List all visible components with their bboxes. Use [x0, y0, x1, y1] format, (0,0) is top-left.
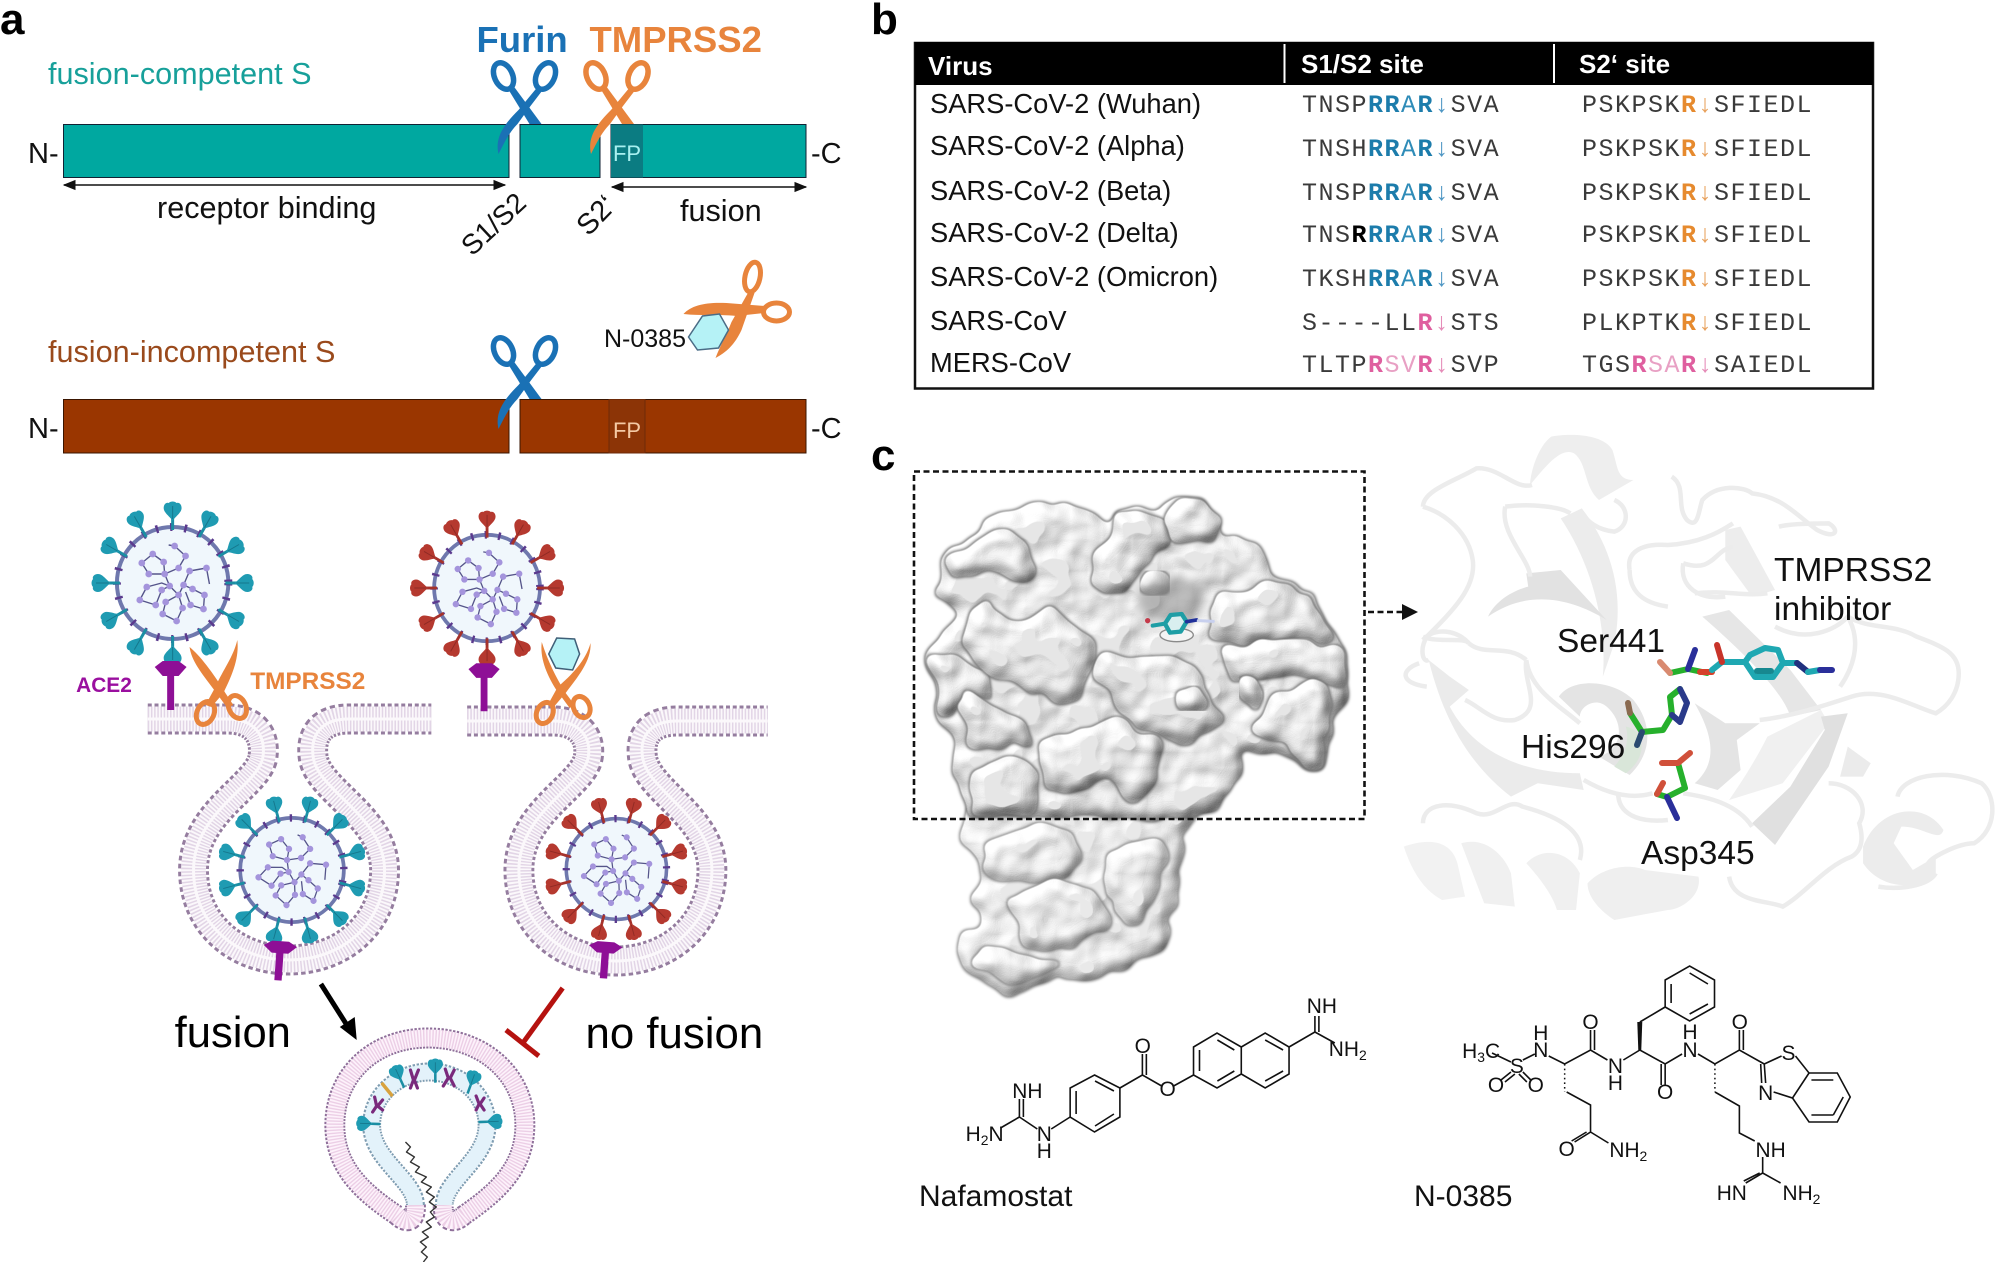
- row: Alpha: SARS-CoV-2 (Alpha): [930, 130, 1185, 161]
- row: Wuhan: [930, 88, 1813, 120]
- His296 sticks: [1628, 689, 1687, 745]
- icon: active TMPRSS2 scissors: [190, 640, 250, 727]
- Ser441 sticks: [1660, 650, 1712, 673]
- row: SARS-CoV: [930, 305, 1813, 338]
- label: His296: His296: [1521, 729, 1625, 766]
- row: Beta: SARS-CoV-2 (Beta): [930, 175, 1171, 206]
- chemical structure: N-0385: O: [1582, 1011, 1599, 1034]
- row: Delta: [930, 217, 1813, 250]
- virus: teal upper: [92, 502, 254, 664]
- label: N-0385: N-0385: [604, 325, 686, 353]
- row: Wuhan: PSKPSKR↓SFIEDL: [1582, 91, 1813, 120]
- label: fusion: fusion: [175, 1008, 291, 1057]
- row: MERS-CoV: TLTPRSVR↓SVP: [1302, 351, 1500, 380]
- chemical structure: Nafamostat: NH: [1012, 1080, 1042, 1103]
- virus: red in vesicle: [527, 779, 706, 959]
- label: S2': S2‘: [570, 190, 623, 242]
- inhibition bar: no fusion: [506, 988, 563, 1056]
- ACE2 receptor: left vesicle: [261, 940, 297, 981]
- icon: furin scissors: [489, 60, 560, 154]
- antibodies and marker: [373, 1069, 484, 1112]
- chemical structure: Nafamostat: NH: [1307, 995, 1337, 1018]
- chemical structure: N-0385: N: [1533, 1039, 1548, 1062]
- arrow: receptor binding span: [64, 184, 505, 186]
- fusion-incompetent S bar: FP: [613, 418, 641, 443]
- chemical structure: N-0385: O: [1657, 1081, 1673, 1104]
- C terminus: -C: [811, 413, 842, 445]
- Furin heading: Furin: [476, 19, 568, 60]
- ligand in pocket: [1145, 614, 1213, 642]
- spikes: [356, 1058, 503, 1132]
- chemical structure: N-0385: O: [1528, 1074, 1544, 1097]
- label: TMPRSS2 inhibitor: TMPRSS2: [1774, 552, 1932, 589]
- chemical structure: N-0385: N: [1758, 1082, 1773, 1105]
- chemical structure: N-0385: 3: [1477, 1049, 1485, 1065]
- label: receptor binding: receptor binding: [157, 191, 376, 225]
- virus: teal in vesicle: [200, 777, 384, 963]
- row: SARS-CoV: PLKPTKR↓SFIEDL: [1582, 309, 1813, 338]
- arrow: fusion: [321, 984, 357, 1040]
- chemical structure: Nafamostat: NH: [1329, 1038, 1359, 1061]
- label: S1/S2: S1/S2: [455, 187, 532, 261]
- icon: N-0385 bound hexagon: [549, 638, 580, 670]
- virus: red upper: [410, 511, 564, 665]
- row: Alpha: TNSHRRAR↓SVA: [1302, 135, 1500, 164]
- table header: Virus: [928, 51, 993, 81]
- pocket shading: [1138, 577, 1205, 623]
- row: MERS-CoV: [930, 347, 1813, 380]
- chemical structure: Nafamostat: O: [1160, 1078, 1176, 1101]
- row: Delta: TNSRRRAR↓SVA: [1302, 221, 1500, 250]
- label: Asp345: Asp345: [1641, 835, 1755, 872]
- chemical structure: N-0385: O: [1732, 1011, 1748, 1034]
- panel b: sequence table: [915, 42, 1873, 388]
- row: MERS-CoV: TGSRSAR↓SAIEDL: [1582, 351, 1813, 380]
- ribbon loops: [1406, 468, 1992, 907]
- chemical structure: N-0385: H: [1682, 1021, 1698, 1044]
- icon: furin scissors: [489, 335, 560, 429]
- chemical structure: Nafamostat: N: [1037, 1123, 1052, 1146]
- row: Wuhan: SARS-CoV-2 (Wuhan): [930, 88, 1201, 119]
- chemical structure: N-0385: H: [1608, 1072, 1623, 1095]
- panel a: domain maps: [28, 19, 842, 453]
- row: Beta: TNSPRRAR↓SVA: [1302, 179, 1500, 208]
- row: Omicron: PSKPSKR↓SFIEDL: [1582, 265, 1813, 294]
- arrow: zoom to binding site: [1368, 604, 1418, 620]
- outer membrane: [335, 1038, 525, 1221]
- row: Delta: PSKPSKR↓SFIEDL: [1582, 221, 1813, 250]
- chemical structure: N-0385: H: [1533, 1022, 1548, 1045]
- panel a: entry mechanism: [76, 502, 768, 1262]
- row: Alpha: [930, 130, 1813, 164]
- fusion-incompetent S bar: [64, 400, 806, 453]
- ACE2 receptor: right top: [468, 663, 500, 711]
- chemical structure: N-0385: O: [1488, 1074, 1504, 1097]
- row: MERS-CoV: MERS-CoV: [930, 347, 1072, 378]
- ribbon sheets: [1404, 435, 1943, 920]
- row: Omicron: TKSHRRAR↓SVA: [1302, 265, 1500, 294]
- row: Beta: PSKPSKR↓SFIEDL: [1582, 179, 1813, 208]
- label: Ser441: Ser441: [1557, 623, 1665, 660]
- chemical structure: N-0385: C: [1485, 1040, 1500, 1063]
- icon: N-0385 hexagon: [688, 314, 728, 350]
- chemical structure: N-0385: 2: [1813, 1191, 1821, 1207]
- row: Omicron: [930, 261, 1813, 294]
- chemical structure: N-0385: N: [1608, 1055, 1623, 1078]
- chemical structure: N-0385: NH: [1783, 1182, 1813, 1205]
- label: Nafamostat: Nafamostat: [919, 1180, 1073, 1213]
- viral RNA: [405, 1142, 436, 1262]
- row: Alpha: PSKPSKR↓SFIEDL: [1582, 135, 1813, 164]
- arrow: fusion span: [612, 186, 806, 188]
- fusion-competent heading: fusion-competent S: [48, 57, 312, 91]
- label: N-0385: N-0385: [1414, 1180, 1512, 1213]
- row: SARS-CoV: S----LLR↓STS: [1302, 309, 1500, 338]
- chemical structure: N-0385: NH: [1756, 1139, 1786, 1162]
- protein surface: [932, 498, 1347, 994]
- protein cartoon: [1404, 435, 1992, 920]
- chemical structure: Nafamostat: N: [988, 1123, 1004, 1146]
- row: Delta: SARS-CoV-2 (Delta): [930, 217, 1179, 248]
- inhibitor sticks: [1712, 645, 1832, 677]
- label: ACE2: ACE2: [76, 674, 132, 697]
- fusion-incompetent heading: fusion-incompetent S: [48, 335, 335, 369]
- chemical structure: Nafamostat: O: [1135, 1035, 1151, 1058]
- Asp345 sticks: [1657, 753, 1690, 818]
- label: fusion: fusion: [680, 194, 762, 228]
- chemical structure: Nafamostat: 2: [1359, 1047, 1367, 1063]
- chemical structure: N-0385: HN: [1717, 1182, 1747, 1205]
- chemical structure: Nafamostat: [966, 995, 1367, 1163]
- chemical structure: N-0385: S: [1510, 1055, 1524, 1078]
- icon: TMPRSS2 scissors: [582, 60, 652, 154]
- label: TMPRSS2: TMPRSS2: [250, 668, 365, 695]
- row: Beta: [930, 175, 1813, 208]
- chemical structure: Nafamostat: H: [966, 1123, 981, 1146]
- N terminus: N-: [28, 413, 59, 445]
- table frame: [915, 43, 1873, 388]
- chemical structure: N-0385: H: [1462, 1040, 1477, 1063]
- fusion-competent S bar: [64, 124, 806, 178]
- N terminus: N-: [28, 138, 59, 170]
- label: TMPRSS2 inhibitor: [1774, 552, 1932, 628]
- upper surface lobes: [932, 498, 1347, 813]
- chemical structure: N-0385: 2: [1640, 1148, 1648, 1164]
- chemical structure: N-0385: O: [1559, 1138, 1575, 1161]
- icon: inhibited TMPRSS2 scissors: [684, 261, 790, 358]
- membrane: right endosome: [467, 721, 768, 961]
- chemical structure: N-0385: N: [1682, 1039, 1698, 1062]
- stick residues: [1628, 645, 1832, 818]
- zoom box: [914, 472, 1364, 819]
- fused vesicle: [335, 1038, 525, 1262]
- row: Wuhan: TNSPRRAR↓SVA: [1302, 91, 1500, 120]
- lower surface lobes: [963, 800, 1209, 994]
- chemical structure: N-0385: S: [1782, 1042, 1796, 1065]
- chemical structure: Nafamostat: 2: [981, 1132, 989, 1148]
- panel c label: c: [871, 431, 895, 480]
- table header: S2‘ site: [1579, 49, 1670, 79]
- table header: [915, 42, 1873, 85]
- icon: inhibited TMPRSS2 scissors: [533, 642, 593, 726]
- ACE2 receptor: left top: [155, 661, 187, 710]
- inner membrane: [372, 1072, 487, 1205]
- chemical structure: N-0385: NH: [1609, 1139, 1640, 1162]
- row: SARS-CoV: SARS-CoV: [930, 305, 1067, 336]
- C terminus: -C: [811, 138, 842, 170]
- TMPRSS2 heading: TMPRSS2: [590, 19, 762, 60]
- label: no fusion: no fusion: [586, 1009, 763, 1058]
- table header: S1/S2 site: [1301, 49, 1424, 79]
- chemical structure: N-0385: [1462, 966, 1850, 1207]
- membrane: left endosome: [148, 719, 431, 960]
- row: Omicron: SARS-CoV-2 (Omicron): [930, 261, 1218, 292]
- chemical structure: Nafamostat: H: [1037, 1140, 1052, 1163]
- label: TMPRSS2 inhibitor: inhibitor: [1774, 591, 1891, 628]
- ACE2 receptor: right vesicle: [587, 941, 623, 980]
- fusion-competent S bar: FP: [613, 141, 641, 166]
